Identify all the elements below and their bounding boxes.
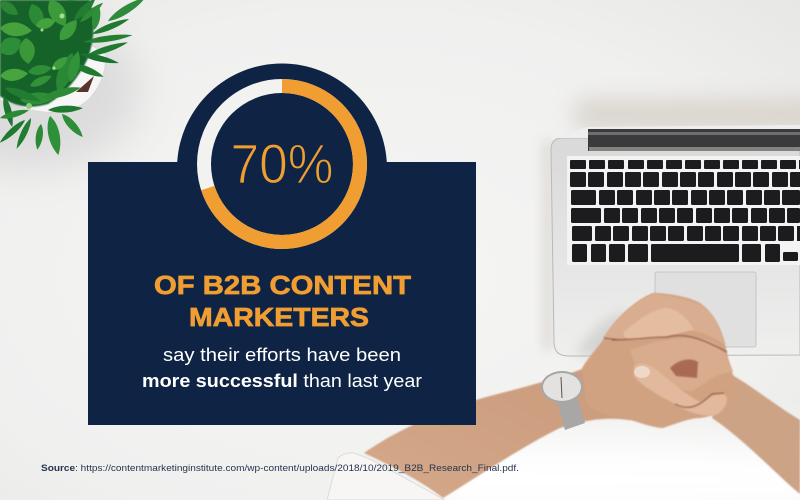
clasped hands	[582, 293, 737, 428]
source note: Source: https://contentmarketinginstitute.com/wp-content/uploads/2018/10/2019_B2B_Research_Final.pdf.	[41, 463, 519, 474]
thumb crease	[675, 393, 724, 407]
keyboard	[567, 156, 800, 265]
description	[142, 344, 422, 391]
trackpad	[655, 272, 756, 347]
laptop body	[551, 138, 800, 356]
panel: dark navy card with dome	[88, 63, 476, 425]
upper fingers	[603, 294, 725, 345]
watch face	[541, 371, 583, 403]
heading: OF B2B CONTENT	[154, 270, 411, 300]
hand shadow on laptop	[575, 310, 625, 356]
watch strap	[557, 396, 585, 430]
description: say their efforts have been	[163, 344, 401, 365]
laptop hinge	[552, 125, 800, 151]
left forearm	[364, 360, 630, 498]
front finger	[624, 308, 694, 340]
plant pot and succulent	[0, 0, 147, 156]
white shirt sleeve	[327, 453, 445, 500]
stat value: 70%	[230, 132, 334, 195]
arms and hands with watch	[327, 293, 800, 500]
thumb	[634, 364, 727, 416]
heading	[154, 270, 411, 332]
lower fingers	[630, 338, 733, 392]
laptop	[551, 125, 800, 356]
finger creases	[604, 335, 727, 352]
description: more successful than last year	[142, 370, 422, 391]
donut chart: 70 percent	[204, 86, 360, 242]
thumbnail	[634, 366, 650, 378]
right forearm	[712, 370, 800, 494]
heading: MARKETERS	[189, 302, 369, 332]
